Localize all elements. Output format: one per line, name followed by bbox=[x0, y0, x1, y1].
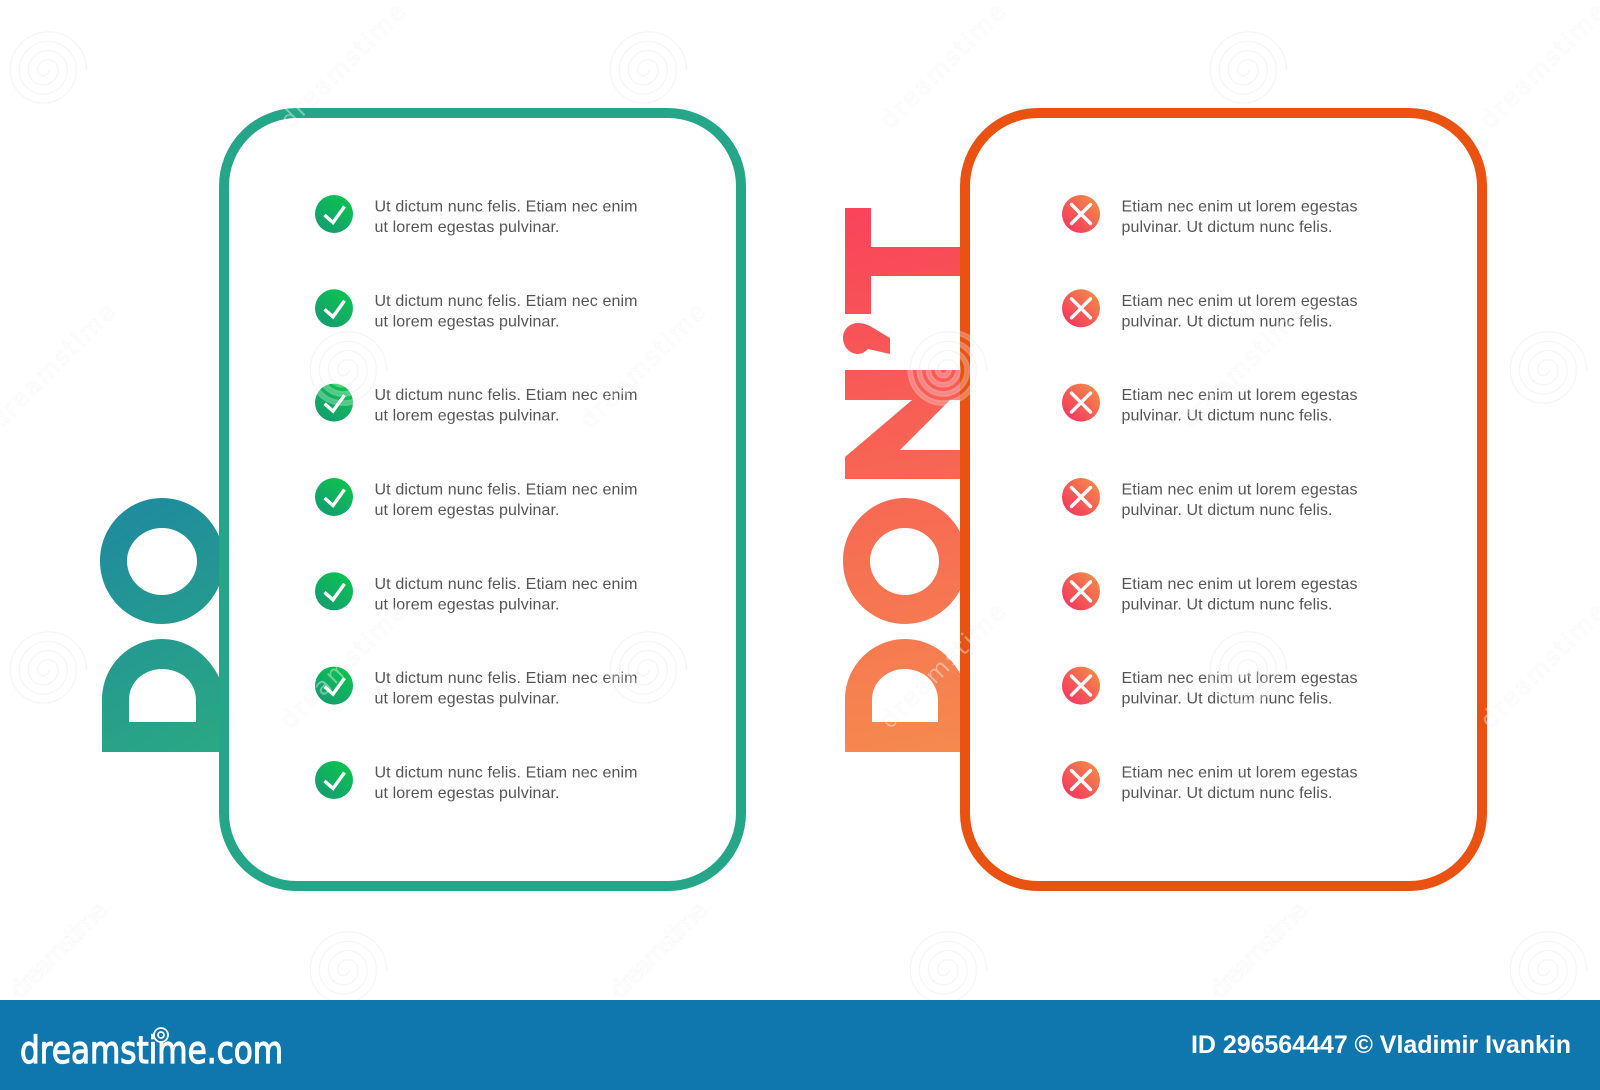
row 4: don't bbox=[1062, 478, 1358, 519]
row 5: do: ut lorem egestas pulvinar. bbox=[374, 596, 560, 613]
panel frame: don't bbox=[965, 113, 1482, 886]
row 6: don't: Etiam nec enim ut lorem egestas bbox=[1122, 670, 1358, 687]
row 1: do: ut lorem egestas pulvinar. bbox=[374, 219, 560, 236]
heading: DON'T bbox=[843, 208, 967, 752]
row 6: don't: pulvinar. Ut dictum nunc felis. bbox=[1122, 691, 1332, 708]
row 3: don't: pulvinar. Ut dictum nunc felis. bbox=[1122, 408, 1332, 425]
row 3: do: ut lorem egestas pulvinar. bbox=[374, 408, 560, 425]
row 1: don't: Etiam nec enim ut lorem egestas bbox=[1122, 198, 1358, 216]
row 3: do bbox=[315, 384, 638, 425]
row 4: do: ut lorem egestas pulvinar. bbox=[374, 502, 560, 519]
row 1: don't: pulvinar. Ut dictum nunc felis. bbox=[1122, 219, 1332, 236]
row 2: don't bbox=[1062, 289, 1358, 330]
row 2: do: Ut dictum nunc felis. Etiam nec enim bbox=[374, 293, 638, 310]
row 6: don't bbox=[1062, 667, 1358, 708]
row 6: do: Ut dictum nunc felis. Etiam nec enim bbox=[374, 670, 638, 687]
row 1: do bbox=[315, 195, 638, 236]
row 6: do: ut lorem egestas pulvinar. bbox=[374, 691, 560, 708]
row 7: do: ut lorem egestas pulvinar. bbox=[374, 785, 560, 802]
row 5: don't bbox=[1062, 572, 1358, 613]
footer credit: ID 296564447 © Vladimir Ivankin bbox=[1191, 1031, 1571, 1059]
row 2: don't: Etiam nec enim ut lorem egestas bbox=[1122, 293, 1358, 310]
row 5: don't: Etiam nec enim ut lorem egestas bbox=[1122, 576, 1358, 593]
panel: do list bbox=[224, 113, 741, 886]
panel frame: do bbox=[224, 113, 741, 886]
watermark text: dreamstime bbox=[604, 896, 713, 1004]
watermark text: dreamstime bbox=[1204, 896, 1313, 1004]
watermark text: dreamstime bbox=[274, 0, 411, 134]
panel: don't list bbox=[965, 113, 1482, 886]
footer logo text: dreamstime.com bbox=[20, 1029, 283, 1072]
watermark text: dreamstime bbox=[1174, 298, 1311, 434]
row 7: do bbox=[315, 761, 638, 802]
row 4: do bbox=[315, 478, 638, 519]
watermark text: dreamstime bbox=[874, 0, 1011, 134]
row 1: do: Ut dictum nunc felis. Etiam nec enim bbox=[374, 198, 638, 216]
row 2: do: ut lorem egestas pulvinar. bbox=[374, 313, 560, 330]
watermark text: dreamstime bbox=[874, 598, 1011, 734]
row 3: don't: Etiam nec enim ut lorem egestas bbox=[1122, 387, 1358, 404]
watermark text: dreamstime bbox=[274, 598, 411, 734]
row 7: don't bbox=[1062, 761, 1358, 802]
row 2: do bbox=[315, 289, 638, 330]
row 3: do: Ut dictum nunc felis. Etiam nec enim bbox=[374, 387, 638, 404]
row 1: don't bbox=[1062, 195, 1358, 236]
row 4: do: Ut dictum nunc felis. Etiam nec enim bbox=[374, 482, 638, 498]
heading: DO bbox=[100, 498, 224, 752]
row 5: don't: pulvinar. Ut dictum nunc felis. bbox=[1122, 596, 1332, 613]
footer bar bbox=[0, 1000, 1600, 1090]
row 6: do bbox=[315, 667, 638, 708]
row 3: don't bbox=[1062, 384, 1358, 425]
row 5: do: Ut dictum nunc felis. Etiam nec enim bbox=[374, 576, 638, 593]
footer logo spiral bbox=[154, 1028, 168, 1042]
row 5: do bbox=[315, 572, 638, 613]
row 4: don't: Etiam nec enim ut lorem egestas bbox=[1122, 482, 1358, 498]
row 7: don't: pulvinar. Ut dictum nunc felis. bbox=[1122, 785, 1332, 802]
watermark text: dreamstime bbox=[574, 298, 711, 434]
row 2: don't: pulvinar. Ut dictum nunc felis. bbox=[1122, 313, 1332, 330]
row 7: don't: Etiam nec enim ut lorem egestas bbox=[1122, 764, 1358, 782]
row 7: do: Ut dictum nunc felis. Etiam nec enim bbox=[374, 764, 638, 782]
row 4: don't: pulvinar. Ut dictum nunc felis. bbox=[1122, 502, 1332, 519]
watermark text: dreamstime bbox=[4, 896, 113, 1004]
